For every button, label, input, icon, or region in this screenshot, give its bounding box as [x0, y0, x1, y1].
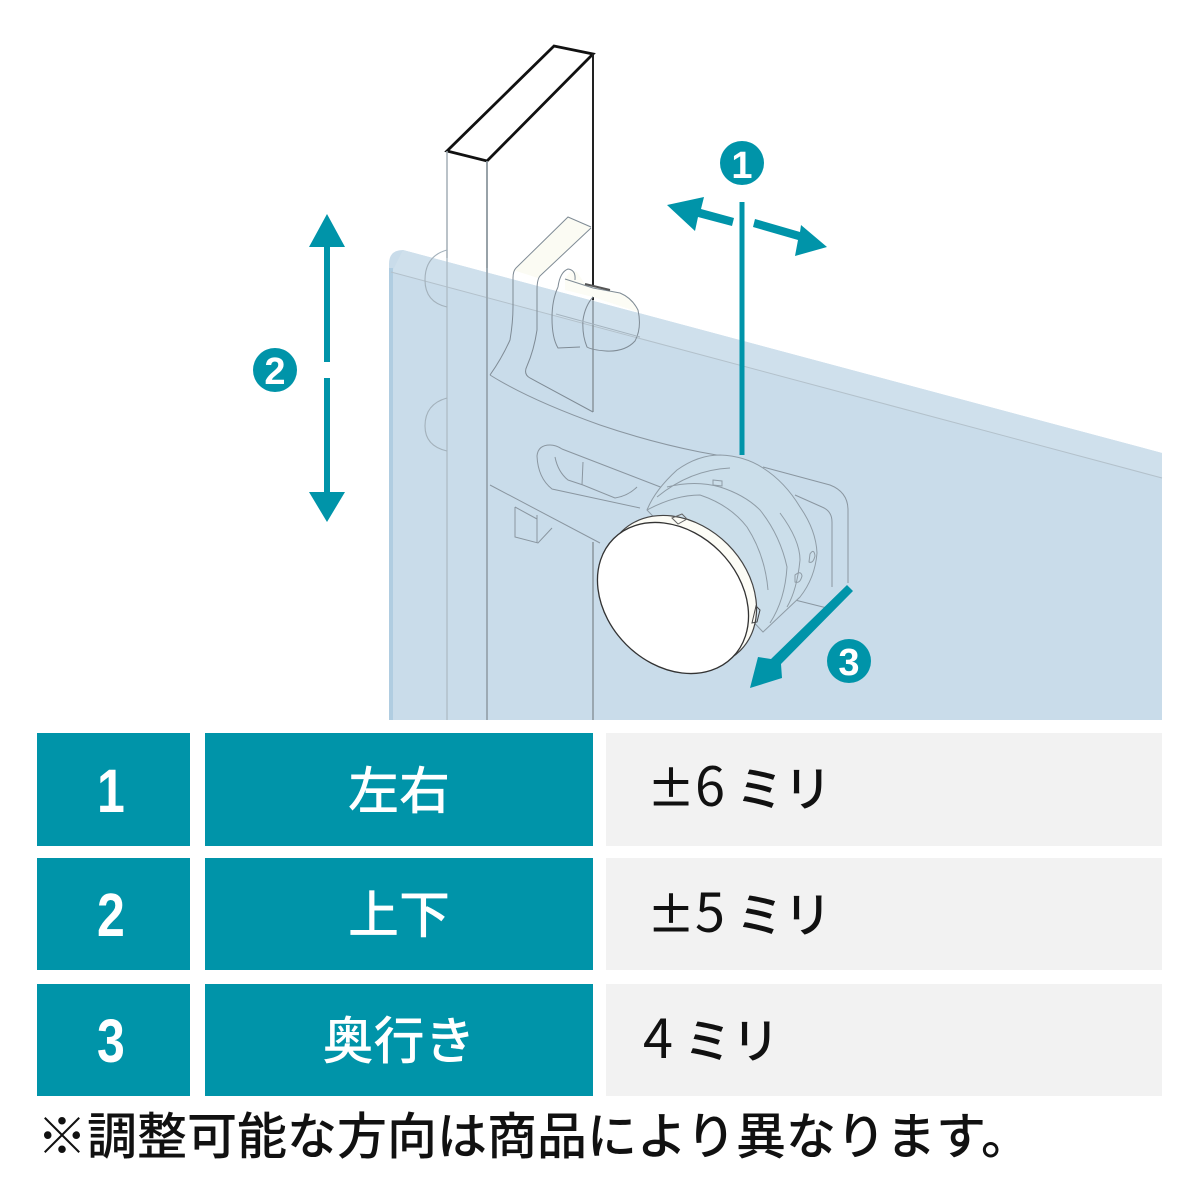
row 2 label: 上下: [348, 874, 450, 948]
hinge pin: [552, 269, 640, 351]
badge 2: [253, 348, 297, 393]
row 1 label: [205, 733, 593, 846]
row 3 value: 4 ミリ: [643, 995, 780, 1074]
badge 1: 1: [731, 145, 753, 187]
row 1 value: [606, 733, 1162, 846]
arrow 3: depth adjustment: [750, 585, 853, 688]
row 1 value: ±6 ミリ: [647, 743, 832, 822]
badge 1: [720, 141, 764, 187]
row 2 value: [606, 858, 1162, 970]
row 2 label: [205, 858, 593, 970]
row 1 number: 1: [97, 756, 124, 824]
arrow 1: left and right adjustment: [667, 197, 827, 455]
adjuster knob: [567, 485, 787, 704]
row 2 number: [37, 858, 190, 970]
row 3 label: 奥行き: [322, 1000, 476, 1074]
row 1 number: [37, 733, 190, 846]
badge 3: [827, 639, 871, 684]
hinge arm with slot: [490, 375, 722, 543]
wood door panel: [389, 250, 1162, 720]
arrow 2: up and down adjustment: [309, 214, 345, 522]
door frame post: [425, 46, 593, 720]
badge 2: 2: [264, 351, 286, 393]
badge 3: 3: [838, 642, 860, 684]
row 2 number: 2: [97, 881, 124, 949]
hinge mounting plate: [490, 217, 593, 412]
row 2 value: ±5 ミリ: [647, 869, 832, 948]
footnote: ※調整可能な方向は商品により異なります。: [37, 1097, 1031, 1169]
rear mounting block: [763, 467, 848, 608]
diagram: door hinge adjustment: [253, 44, 1162, 720]
row 3 number: [37, 984, 190, 1096]
row 3 number: 3: [97, 1007, 124, 1075]
row 3 label: [205, 984, 593, 1096]
row 3 value: [606, 984, 1162, 1096]
adjuster cylinder: [647, 455, 817, 632]
row 1 label: 左右: [348, 750, 450, 824]
